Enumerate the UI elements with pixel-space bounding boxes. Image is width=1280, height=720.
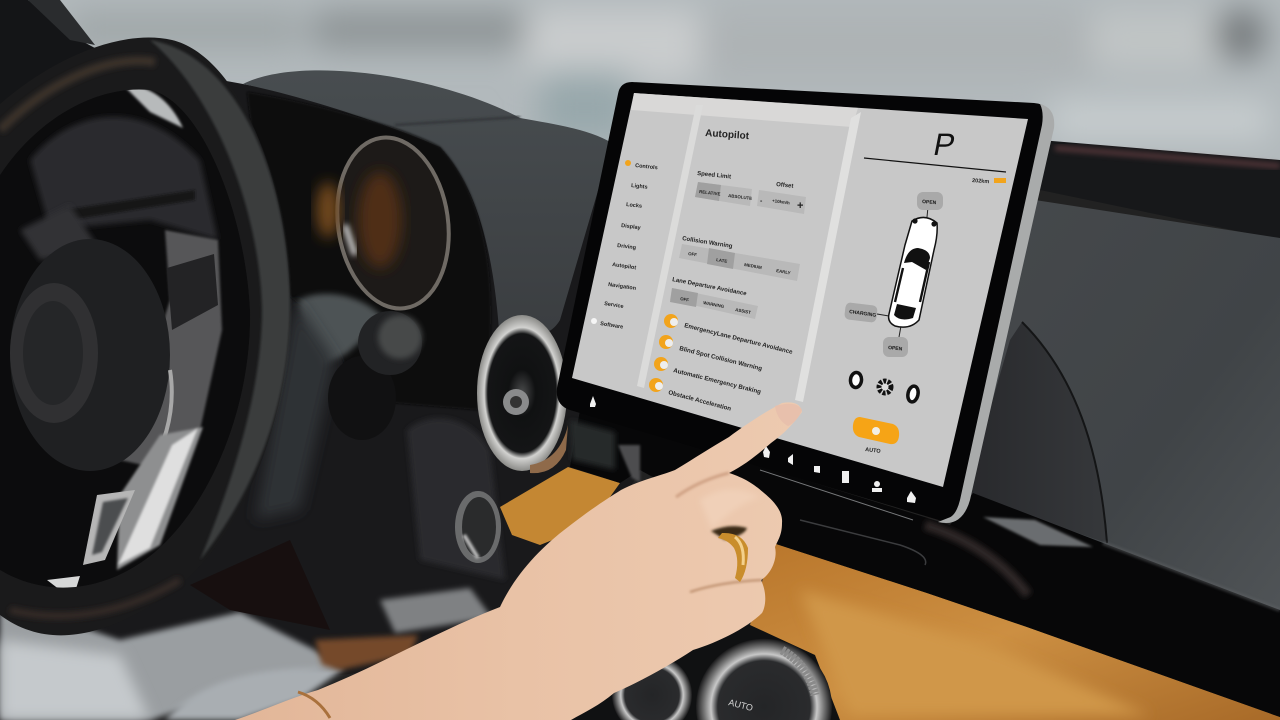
panel: dark dashboard and instrument hood — [0, 40, 640, 720]
icon: climate knobs — [612, 639, 832, 720]
menu list: Lights — [631, 183, 648, 191]
setting: collision warning: EARLY — [776, 268, 791, 276]
icon: hand touching screen — [235, 402, 802, 720]
panel: tablet touchscreen — [557, 82, 1054, 523]
diagram: car status — [844, 192, 943, 357]
diagram: car status: OPEN — [888, 345, 903, 353]
setting: speed limit: Offset — [776, 182, 794, 190]
setting: collision warning: LATE — [716, 257, 728, 264]
setting: lane departure avoidance: WARNING — [703, 300, 725, 309]
setting: collision warning: Collision Warning — [682, 236, 733, 250]
icon row: bottom bar — [590, 396, 916, 503]
setting: lane departure avoidance: ASSIST — [735, 307, 752, 315]
menu list: Service — [604, 301, 624, 310]
menu list: Display — [621, 223, 642, 231]
setting: speed limit: RELATIVE — [699, 189, 721, 197]
menu list: Controls — [635, 163, 658, 171]
background: blurred parking lot through windshield — [0, 0, 1280, 190]
icon: small round button — [455, 491, 501, 563]
bezel edge line — [760, 470, 913, 520]
tablet silver edge — [938, 104, 1054, 523]
setting: lane departure avoidance: Lane Departure Avoidance — [672, 277, 748, 298]
heading: Autopilot: Autopilot — [705, 128, 750, 142]
setting: speed limit — [695, 171, 806, 214]
icon: bracelet on wrist — [298, 692, 330, 718]
menu list: Navigation — [608, 282, 637, 292]
menu list: Autopilot — [612, 262, 637, 271]
setting: collision warning: OFF — [688, 251, 698, 257]
icon: steering column stalk — [328, 311, 422, 440]
divider line and range: 202km — [972, 178, 989, 185]
panel: right dashboard — [965, 140, 1280, 620]
toggle list — [649, 314, 794, 413]
icon: seat heaters and fan — [850, 372, 920, 403]
toggle list: Automatic Emergency Braking — [673, 367, 762, 396]
diagram: car status: OPEN — [922, 199, 937, 206]
button: auto: AUTO — [865, 447, 882, 455]
setting: speed limit: ABSOLUTE — [728, 193, 753, 201]
setting: speed limit: +10km/h — [772, 198, 790, 205]
setting: lane departure avoidance — [670, 277, 758, 319]
panel: orange leather dash trim — [500, 467, 1280, 720]
icon: gold ring — [718, 533, 748, 582]
toggle list: EmergencyLane Departure Avoidance — [684, 322, 794, 356]
toggle list: Obstacle Acceleration — [667, 389, 732, 413]
map strip — [631, 93, 861, 402]
menu list: Driving — [617, 243, 636, 251]
setting: collision warning: MEDIUM — [744, 262, 763, 270]
icon: steering wheel — [0, 0, 290, 635]
setting: speed limit: Speed Limit — [697, 171, 731, 181]
icon: instrument gauge ring — [316, 130, 459, 316]
panel: lower center console — [490, 600, 840, 720]
toggle list: Blind Spot Collision Warning — [679, 345, 763, 373]
menu list: Locks — [626, 202, 642, 210]
divider line and range — [864, 158, 1006, 185]
icon: round air vent — [477, 315, 568, 473]
setting: collision warning — [679, 236, 800, 281]
gear indicator P: P — [931, 127, 958, 162]
tablet body — [557, 82, 1052, 522]
panel: glossy black trim under screen — [570, 410, 1280, 717]
setting: lane departure avoidance: OFF — [680, 296, 690, 303]
panel: seat, lap and lower footwell — [0, 540, 492, 720]
setting: speed limit: + — [797, 200, 803, 212]
screen surface — [572, 93, 1028, 487]
setting: speed limit: - — [760, 198, 763, 205]
menu list — [591, 160, 658, 331]
diagram: car status: CHARGING — [849, 309, 877, 319]
menu list: Software — [600, 321, 624, 331]
button: auto — [853, 417, 899, 455]
icon: climate knobs: AUTO — [728, 697, 754, 713]
